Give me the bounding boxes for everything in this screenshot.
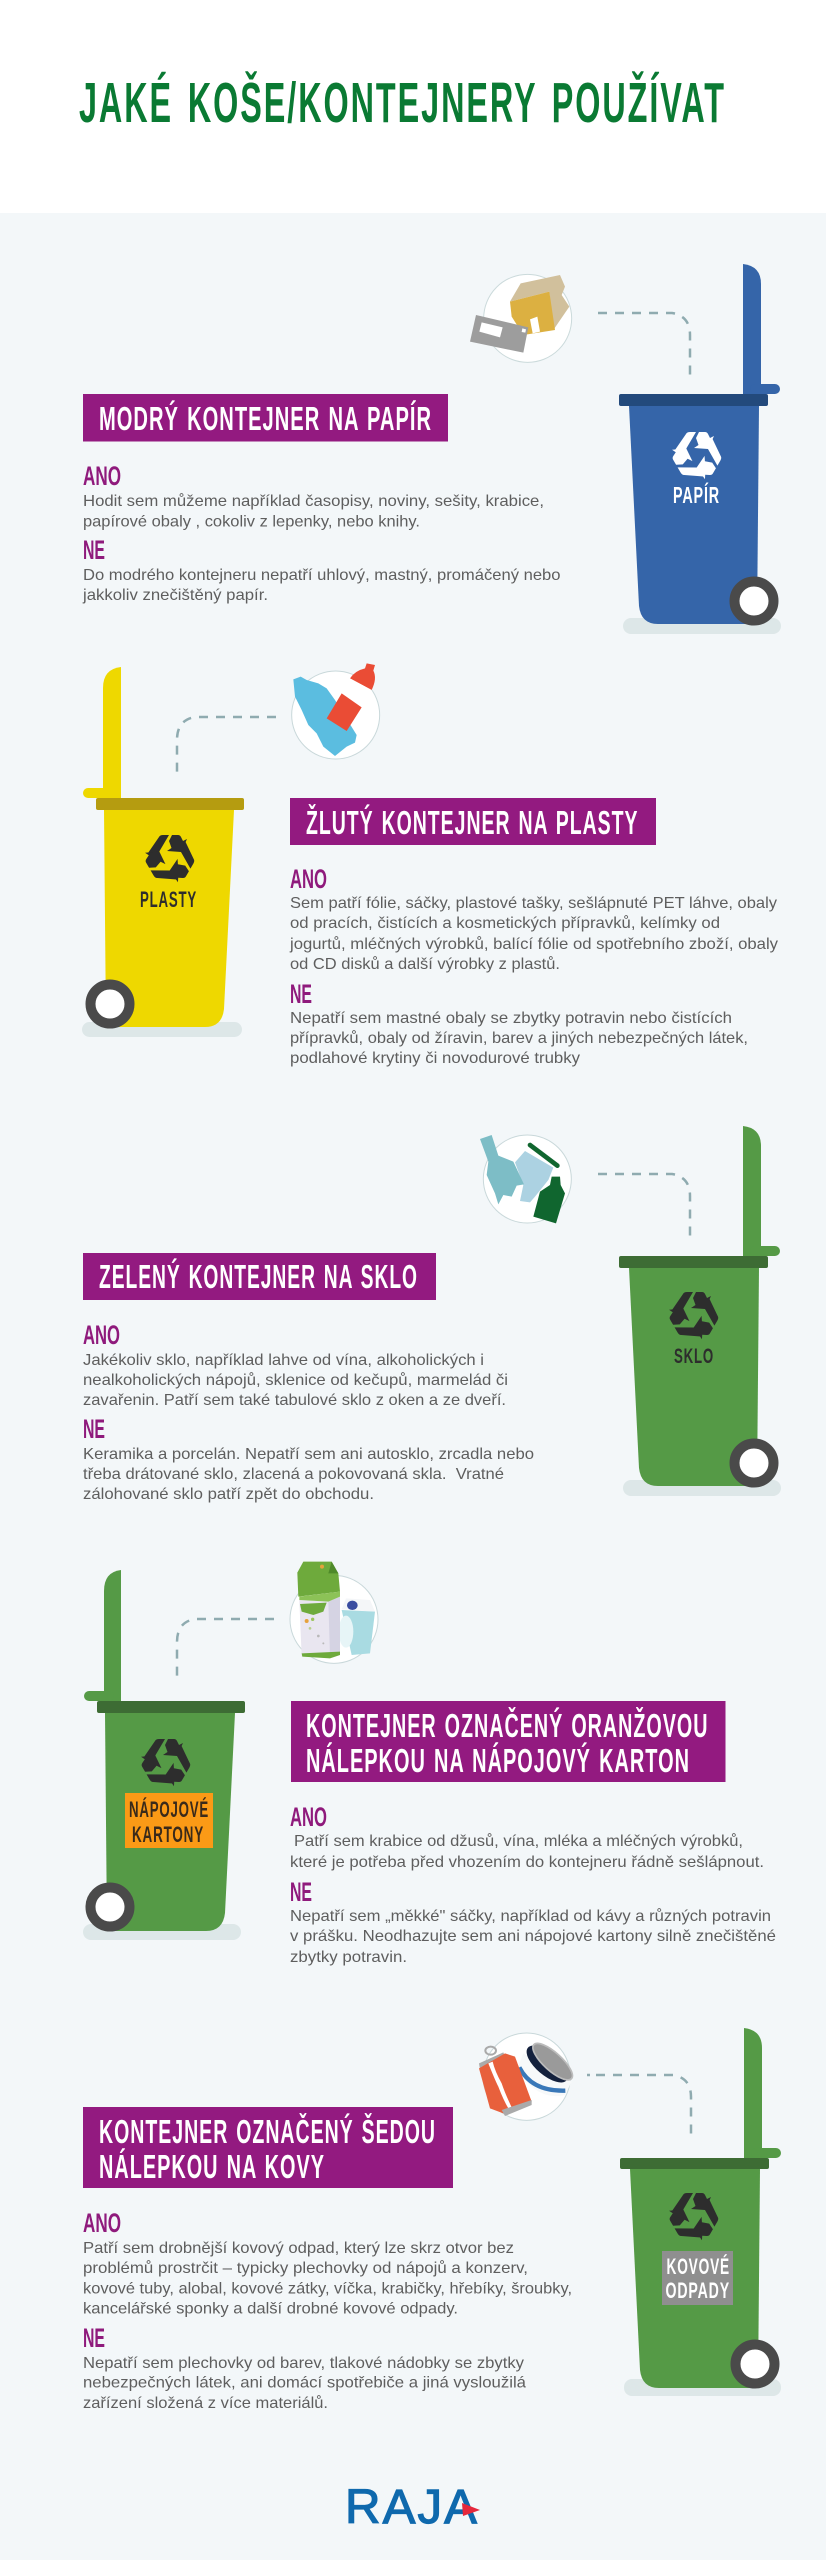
text block: NE: jakkoliv znečištěný papír. [82,587,268,604]
text block: NE: NE [290,979,312,1009]
heading: grey label container: NÁLEPKOU NA KOVY [99,2148,325,2185]
text block: ANO [290,1802,764,1871]
text block: NE: NE [83,535,105,565]
icon: plastic bottles [292,663,380,759]
arrow: glass to bin [598,1174,690,1237]
text block: ANO: kancelářské sponky a další drobné kovové odpady. [83,2300,458,2318]
heading: blue container: MODRÝ KONTEJNER NA PAPÍR [99,400,432,437]
bin label: KOVOVÉ ODPADY: KOVOVÉ [666,2254,730,2279]
text block: NE: zbytky potravin. [290,1949,407,1966]
icon: recycling symbol [138,1739,197,1793]
bin label: NÁPOJOVÉ KARTONY: NÁPOJOVÉ [129,1797,209,1822]
text block: NE: NE [290,1877,312,1907]
text block: ANO: od CD disků a další výrobky z plastů. [290,955,560,973]
bin label: PAPÍR: PAPÍR [673,481,720,508]
bin label: KOVOVÉ ODPADY [662,2251,733,2305]
icon: green bin with orange label [83,1570,245,1940]
icon: recycling symbol [669,432,728,486]
arrow: paper to bin [598,313,690,377]
text block: ANO: ANO [290,1802,327,1832]
text block: ANO: Jakékoliv sklo, například lahve od vína, alkoholických i [83,1352,484,1369]
text block: NE: v prášku. Neodhazujte sem ani nápojové kartony silně znečištěné [290,1928,776,1945]
text block: NE: zařízení složená z více materiálů. [83,2394,328,2412]
text block: NE: nebezpečných látek, ani domácí spotřebiče a jiná vysloužilá [83,2374,526,2392]
bin label: SKLO: SKLO [674,1345,714,1368]
heading: blue container [83,394,448,442]
text block: NE [290,979,748,1067]
panel: green glass container [83,1126,781,1503]
text block: ANO: nealkoholických nápojů, sklenice od kečupů, marmelád či [83,1371,508,1389]
text block: NE: Nepatří sem plechovky od barev, tlakové nádobky se zbytky [83,2355,524,2372]
icon: blue bin [619,264,781,634]
text block: NE: Do modrého kontejneru nepatří uhlový, mastný, promáčený nebo [83,567,561,584]
panel: blue paper container [82,264,781,634]
arrow: cartons to bin [177,1619,274,1677]
text block: NE [83,1414,534,1503]
panel: grey label metal container [83,2028,781,2412]
text block: ANO: zavařenin. Patří sem také tabulové sklo z oken a ze dveří. [83,1392,506,1409]
logo: RAJA: RAJA [345,2481,479,2534]
panel: yellow plastics container [82,663,778,1067]
text block: ANO: ANO [290,864,327,894]
text block: ANO: ANO [83,1320,120,1350]
text block: ANO: Hodit sem můžeme například časopisy, noviny, sešity, krabice, [83,492,544,510]
text block: NE [290,1877,776,1966]
icon: recycling symbol [142,835,201,889]
text block: NE: přípravků, obaly od žíravin, barev a jiných nebezpečných látek, [290,1029,748,1047]
text block: ANO: Patří sem krabice od džusů, vína, mléka a mléčných výrobků, [294,1832,743,1850]
heading: grey label container [83,2107,453,2188]
text block: NE: Nepatří sem „měkké" sáčky, například od kávy a různých potravin [290,1907,771,1925]
text block: NE: NE [83,2323,105,2353]
heading: green container: ZELENÝ KONTEJNER NA SKLO [99,1258,418,1295]
text block: ANO [83,461,544,530]
bin label: KOVOVÉ ODPADY: ODPADY [666,2278,730,2303]
icon: recycling symbol [666,2193,725,2247]
text block: NE: Nepatří sem mastné obaly se zbytky potravin nebo čistících [290,1010,732,1027]
text block: ANO: problémů prostrčit – typicky plechovky od nápojů a konzerv, [83,2259,528,2277]
bin label: NÁPOJOVÉ KARTONY [125,1793,213,1848]
text block: ANO: ANO [83,461,121,491]
text block: NE: Keramika a porcelán. Nepatří sem ani autosklo, zrcadla nebo [83,1446,534,1463]
text block: ANO: Patří sem drobnější kovový odpad, který lze skrz otvor bez [83,2240,514,2257]
heading: green container [83,1253,436,1300]
text block: NE: podlahové krytiny či novodurové trubky [290,1050,580,1067]
icon: beverage cartons [290,1562,378,1663]
icon: green bin with grey label [620,2028,781,2396]
text block: ANO: papírové obaly , cokoliv z lepenky, nebo knihy. [83,514,420,530]
icon: paper and cardboard [470,274,572,362]
text block: ANO: od pracích, čistících a kosmetických přípravků, kelímky od [290,914,720,932]
heading: yellow container [290,798,656,845]
text block: NE: NE [83,1414,105,1444]
text block: ANO: ANO [83,2208,121,2238]
arrow: plastics to bin [177,717,276,773]
arrow: metal to bin [587,2075,691,2139]
icon: yellow bin [82,667,244,1037]
text block: ANO [289,864,778,973]
icon: green bin [619,1126,781,1496]
heading: orange label container [291,1701,726,1782]
icon: glass bottles [480,1135,571,1223]
icon: recycling symbol [666,1292,725,1346]
text block: ANO: jogurtů, mléčných výrobků, balící fólie od spotřebního zboží, obaly [289,935,778,953]
panel: orange label beverage carton container [83,1562,776,1966]
text block: ANO [83,1320,508,1409]
bin label: NÁPOJOVÉ KARTONY: KARTONY [132,1822,204,1847]
icon: metal cans [479,2033,578,2120]
text block: ANO: kovové tuby, alobal, kovové zátky, víčka, krabičky, hřebíky, šroubky, [83,2280,572,2298]
text block: NE: zálohované sklo patří zpět do obchodu. [83,1486,374,1503]
text block: NE [82,535,561,604]
text block: NE: třeba drátované sklo, zlacená a pokovovaná skla. Vratné [83,1466,504,1483]
text block: ANO [83,2208,572,2318]
text block: ANO: které je potřeba před vhozením do kontejneru řádně sešlápnout. [290,1854,764,1871]
text block: ANO: Sem patří fólie, sáčky, plastové tašky, sešlápnuté PET láhve, obaly [290,895,777,912]
heading: grey label container: KONTEJNER OZNAČENÝ ŠEDOU [99,2112,436,2150]
text block: NE [83,2323,526,2412]
bin label: PLASTY: PLASTY [140,887,197,912]
